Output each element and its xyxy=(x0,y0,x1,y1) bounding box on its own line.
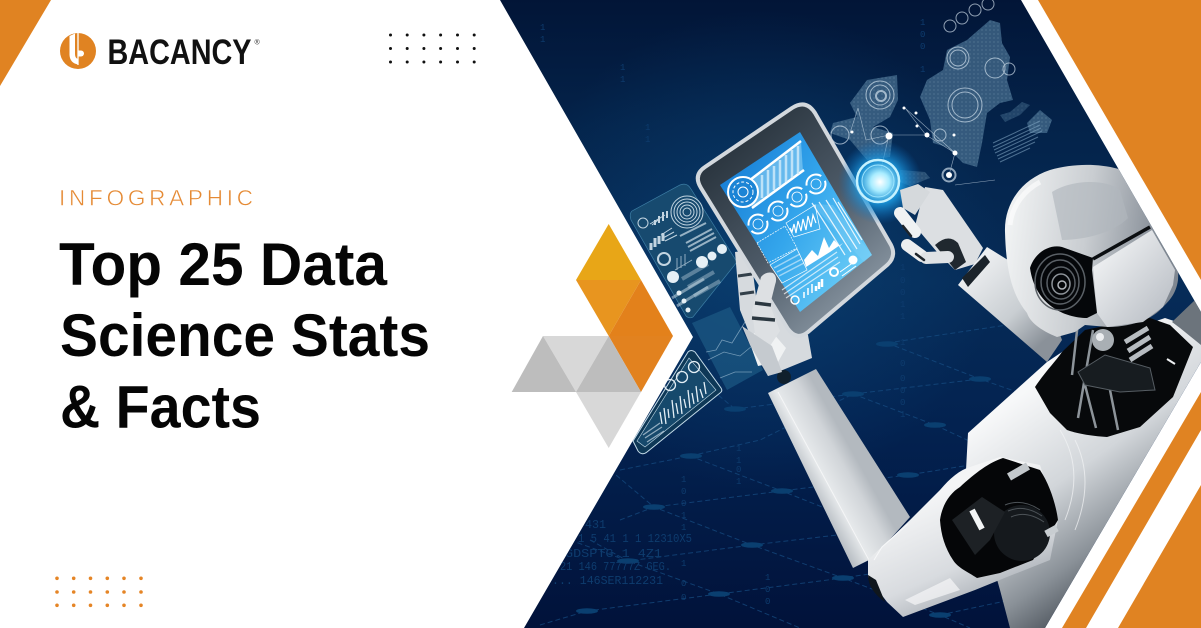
code text: 1 xyxy=(645,123,650,133)
code text: 1 xyxy=(900,263,905,273)
code text: 1 xyxy=(736,477,741,487)
dot grid: bottom xyxy=(55,576,143,607)
code text: 1 xyxy=(920,65,925,75)
code text: 0 xyxy=(900,386,905,396)
face plate xyxy=(1093,230,1175,327)
code text: 1 xyxy=(900,312,905,322)
code text: 0 xyxy=(681,487,686,497)
robot head xyxy=(1005,165,1178,337)
title: Science Stats xyxy=(60,302,430,369)
code text: 1 xyxy=(681,475,686,485)
code text: 1 xyxy=(620,75,625,85)
code text: 1 xyxy=(645,135,650,145)
robot elbow and shoulder joint xyxy=(868,457,1058,617)
logo: Bacancy: ® xyxy=(254,38,260,46)
code text: 1 xyxy=(681,559,686,569)
code text: 1 xyxy=(681,523,686,533)
code text: 0 xyxy=(920,42,925,52)
neck ball joint xyxy=(1092,329,1114,351)
code text: 0 xyxy=(681,579,686,589)
code text: 0 xyxy=(736,465,741,475)
dot grid: top xyxy=(389,34,476,64)
code text: 1 xyxy=(900,300,905,310)
shoulder joint mechanism xyxy=(940,458,1058,578)
title: Top 25 Data xyxy=(59,231,388,298)
code text: 0 xyxy=(900,359,905,369)
code text: 1 xyxy=(540,23,545,33)
code text: GDSPTG.1 4Z1 xyxy=(565,547,662,561)
code text: 0 xyxy=(900,374,905,384)
robot hand pointing xyxy=(900,184,983,270)
code text: 0 xyxy=(900,398,905,408)
robot upper arm xyxy=(958,247,1062,362)
code text: 1 xyxy=(681,511,686,521)
eye lens xyxy=(1030,246,1097,318)
forearm xyxy=(768,369,910,568)
code text: 1 xyxy=(540,35,545,45)
code text: 0 xyxy=(681,593,686,603)
neck cavity xyxy=(1035,317,1193,437)
code text: 1 xyxy=(920,18,925,28)
right orange stripes xyxy=(1038,0,1201,628)
code text: 1 xyxy=(765,573,770,583)
tablet screen xyxy=(720,132,872,312)
code text: 1 xyxy=(900,410,905,420)
code text xyxy=(540,18,925,607)
code text: 0 xyxy=(765,597,770,607)
code text: 0 xyxy=(900,288,905,298)
tablet xyxy=(698,104,893,336)
corner accent triangle xyxy=(0,0,51,86)
title xyxy=(59,231,430,440)
code text: 1 5 41 1 1 12310X5 xyxy=(578,532,692,546)
logo: Bacancy: BACANCY xyxy=(108,32,252,72)
robot torso xyxy=(966,317,1201,628)
title: & Facts xyxy=(60,374,261,440)
code text: 0 xyxy=(900,276,905,286)
photo panel: robot with tablet xyxy=(490,0,1201,628)
hologram panel: waveform xyxy=(633,350,722,454)
world map xyxy=(830,0,1052,186)
code text: 431 xyxy=(585,518,606,532)
code text: 0 xyxy=(765,585,770,595)
code text: 1 xyxy=(736,444,741,454)
robot hand at right edge xyxy=(1172,300,1201,345)
logo: Bacancy xyxy=(60,32,260,72)
glowing touch point xyxy=(838,140,922,224)
code text: 1 xyxy=(620,63,625,73)
code text: 0 xyxy=(681,499,686,509)
code text: ... 146SER112231 xyxy=(552,574,663,588)
hologram panel: dashboard xyxy=(630,184,737,318)
network lines xyxy=(540,320,1040,628)
code text: 1 xyxy=(900,338,905,348)
network nodes xyxy=(576,341,991,618)
eyebrow label: INFOGRAPHIC xyxy=(59,186,253,211)
triangle cluster xyxy=(512,224,673,448)
code text: 21 146 77777Z GEG. xyxy=(560,560,671,574)
thumb on tablet xyxy=(742,272,782,376)
code text: 1 xyxy=(736,456,741,466)
hologram panel: line chart xyxy=(692,307,763,390)
hand holding tablet: fingers behind xyxy=(735,250,812,376)
code text: 0 xyxy=(920,30,925,40)
